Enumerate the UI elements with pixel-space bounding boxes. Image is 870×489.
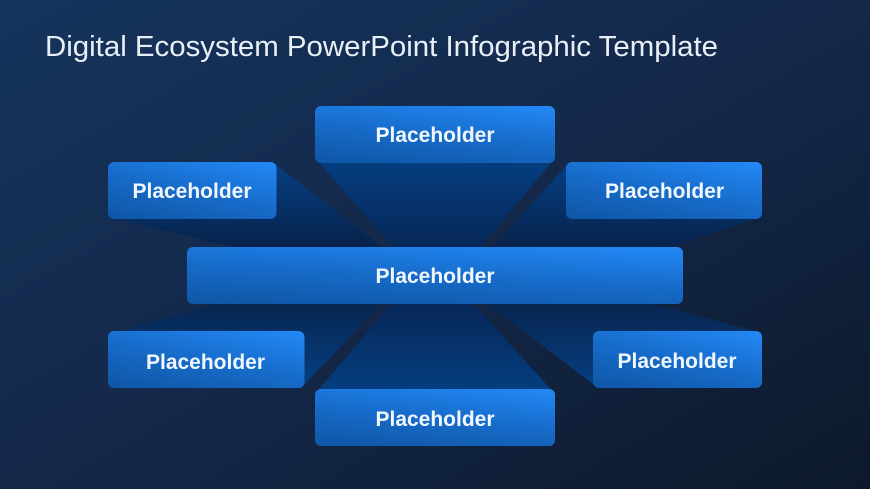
box: bottom bbox=[315, 389, 555, 446]
connector: upper right bbox=[492, 164, 758, 248]
title: Digital Ecosystem PowerPoint Infographic Template bbox=[45, 31, 718, 63]
box: center bbox=[187, 247, 683, 304]
connector: upper left bbox=[112, 164, 383, 248]
box: lower left bbox=[108, 331, 304, 388]
box: lower right bbox=[593, 331, 762, 388]
box: upper left bbox=[108, 162, 276, 219]
box: upper right: Placeholder bbox=[605, 180, 724, 203]
box: lower right: Placeholder bbox=[618, 350, 736, 373]
connector: top bbox=[315, 158, 555, 248]
connector: bottom bbox=[315, 303, 555, 394]
box: bottom: Placeholder bbox=[376, 408, 494, 431]
box: lower left: Placeholder bbox=[146, 351, 265, 374]
connector: lower right bbox=[487, 303, 758, 388]
box: top: Placeholder bbox=[376, 124, 494, 147]
box: top bbox=[315, 106, 555, 163]
box: upper right bbox=[566, 162, 762, 219]
box: upper left: Placeholder bbox=[132, 180, 252, 203]
connector: lower left bbox=[118, 303, 382, 385]
box: center: Placeholder bbox=[376, 265, 494, 288]
